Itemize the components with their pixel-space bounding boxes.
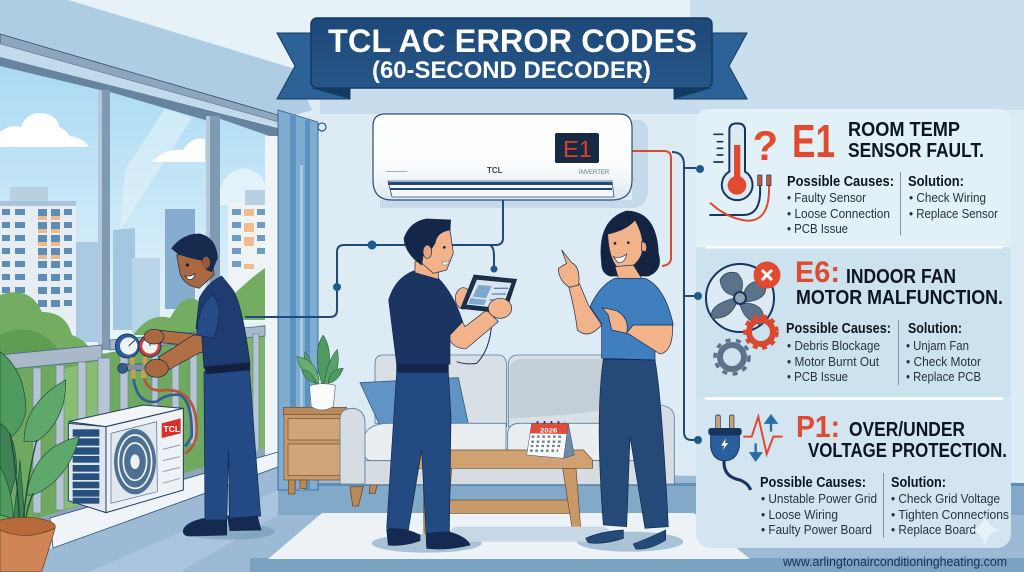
P1 heading	[808, 419, 1007, 462]
P1 heading: OVER/UNDER	[849, 419, 965, 441]
E6 causes	[786, 321, 891, 384]
E6 section: E6:	[795, 256, 840, 289]
P1 section: P1:	[796, 409, 840, 444]
window with city view	[0, 34, 278, 548]
clouds	[0, 113, 265, 205]
title line 1: TCL AC ERROR CODES	[328, 23, 697, 59]
icon: thermometer	[709, 122, 778, 221]
P1 causes: Possible Causes:	[760, 475, 866, 491]
E6 causes: • Debris Blockage	[787, 339, 880, 353]
P1 causes: • Loose Wiring	[761, 508, 838, 522]
E1 causes	[787, 174, 894, 236]
plant pot	[0, 517, 55, 572]
E1 solution: • Check Wiring	[909, 191, 986, 205]
E6 heading: MOTOR MALFUNCTION.	[796, 287, 1003, 309]
E6 solution: • Replace PCB	[906, 370, 981, 384]
E1 causes: • Loose Connection	[787, 207, 890, 221]
P1 solution	[891, 475, 1009, 537]
curtain	[278, 110, 326, 490]
outdoor unit	[68, 405, 183, 513]
title line 2: (60-SECOND DECODER)	[372, 57, 651, 84]
coffee table	[417, 450, 593, 540]
buildings	[0, 187, 265, 342]
rug	[268, 513, 750, 559]
E6 solution	[906, 321, 981, 384]
E6 heading: INDOOR FAN	[846, 266, 956, 288]
AC display	[555, 133, 599, 163]
technician with gauges and outdoor unit	[68, 234, 275, 540]
indoor AC unit: INVERTER	[579, 170, 610, 176]
calendar	[527, 422, 574, 458]
AC display: E1	[563, 136, 592, 162]
P1 causes: • Unstable Power Grid	[761, 492, 877, 506]
manifold gauges	[115, 334, 161, 379]
technician figure	[144, 234, 261, 536]
P1 solution: • Check Grid Voltage	[891, 492, 1000, 506]
E1 causes: • Faulty Sensor	[787, 191, 866, 205]
E6 section	[706, 256, 1003, 385]
window frames	[0, 34, 278, 548]
outdoor unit: TCL	[163, 424, 181, 434]
connector nodes	[694, 165, 704, 444]
E6 solution: Solution:	[908, 321, 962, 337]
woman pointing	[558, 211, 673, 549]
E6 causes: • Motor Burnt Out	[787, 355, 879, 369]
P1 causes: • Faulty Power Board	[761, 523, 872, 537]
E1 causes: • PCB Issue	[787, 222, 848, 236]
E6 solution: • Check Motor	[906, 355, 981, 369]
indoor AC unit	[373, 114, 632, 200]
E1 heading: ROOM TEMP	[848, 119, 960, 141]
man with tablet	[387, 219, 517, 549]
E1 heading	[848, 119, 984, 162]
P1 solution: Solution:	[891, 475, 946, 491]
E1 solution: • Replace Sensor	[909, 207, 998, 221]
indoor AC unit: TCL	[487, 166, 503, 175]
E1 solution: Solution:	[908, 174, 964, 190]
E1 solution	[908, 174, 998, 221]
floor shadow	[185, 524, 275, 540]
E6 causes: • PCB Issue	[787, 370, 848, 384]
P1 solution: • Replace Board	[891, 523, 976, 537]
calendar: 2026	[540, 427, 558, 434]
right panel	[694, 109, 1011, 548]
sofa, table and people	[340, 211, 683, 553]
tablet	[461, 275, 517, 313]
website url: www.arlingtonairconditioningheating.com	[782, 555, 1007, 569]
P1 solution: • Tighten Connections	[891, 508, 1009, 522]
E1 causes: Possible Causes:	[787, 174, 894, 190]
E1 heading: SENSOR FAULT.	[848, 140, 984, 162]
P1 causes	[760, 475, 877, 537]
pipes	[245, 146, 700, 440]
icon: plug and voltage	[708, 415, 783, 490]
E6 causes: Possible Causes:	[786, 321, 891, 337]
E6 solution: • Unjam Fan	[906, 339, 969, 353]
cabinet and small plant	[283, 335, 347, 494]
sofa	[340, 355, 674, 506]
P1 section	[708, 409, 1009, 538]
E1 section: E1	[792, 115, 835, 167]
floor shadows	[372, 527, 683, 553]
hoses	[133, 377, 197, 453]
icon: fan and gears	[706, 262, 780, 374]
trees	[0, 268, 265, 530]
icon: thermometer: ?	[753, 122, 778, 169]
E1 section	[709, 115, 998, 236]
plant left	[0, 352, 79, 572]
ribbon tails	[277, 33, 747, 99]
E6 heading	[796, 266, 1003, 309]
title banner	[277, 18, 747, 99]
